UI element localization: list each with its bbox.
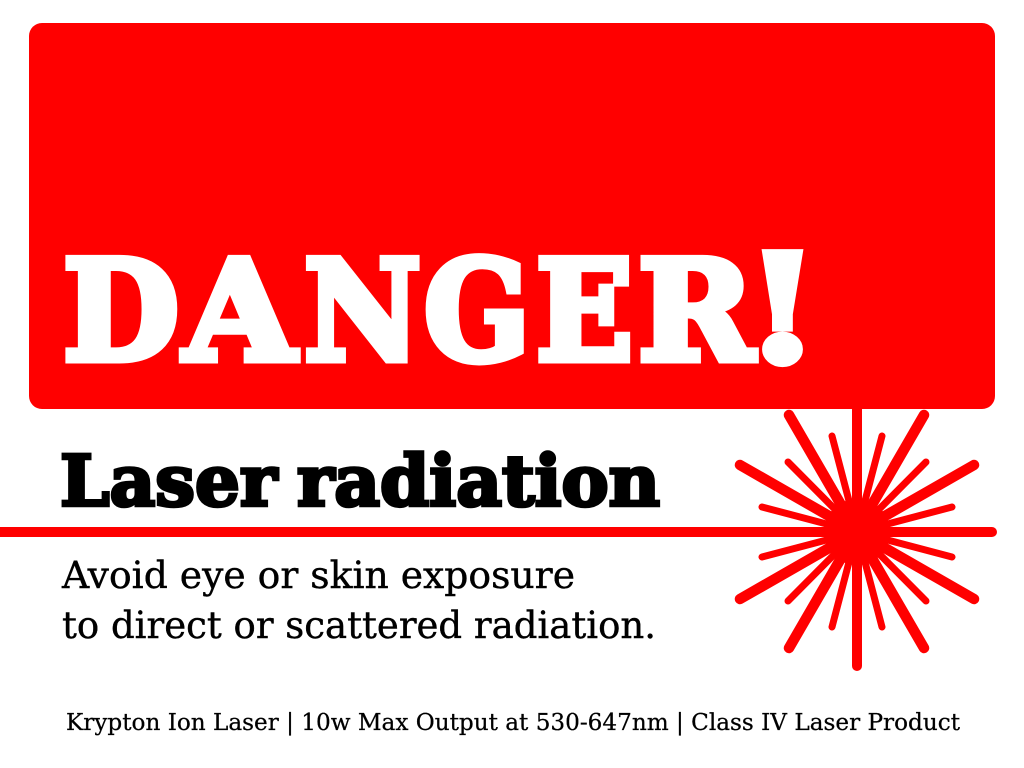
title: DANGER!: !	[745, 222, 820, 396]
warning text: Avoid eye or skin exposure	[61, 554, 575, 597]
footer: laser specifications: Krypton Ion Laser | 10w Max Output at 530-647nm | Class IV Laser Product	[66, 710, 961, 736]
title: DANGER!: R	[638, 230, 755, 392]
heading: Laser radiation: Laser	[60, 440, 278, 522]
warning text	[61, 554, 656, 647]
title: DANGER!: E	[536, 230, 633, 392]
panel: red danger header	[29, 23, 995, 409]
title: DANGER!: G	[424, 230, 530, 392]
heading: Laser radiation	[60, 440, 660, 522]
title: DANGER!: N	[304, 230, 421, 392]
title: DANGER!: D	[63, 230, 179, 392]
icon: laser starburst with beam	[0, 405, 992, 666]
heading: Laser radiation: radiation	[297, 440, 660, 522]
title: DANGER!	[63, 222, 820, 396]
title: DANGER!: A	[182, 230, 297, 392]
warning text: to direct or scattered radiation.	[62, 604, 656, 647]
